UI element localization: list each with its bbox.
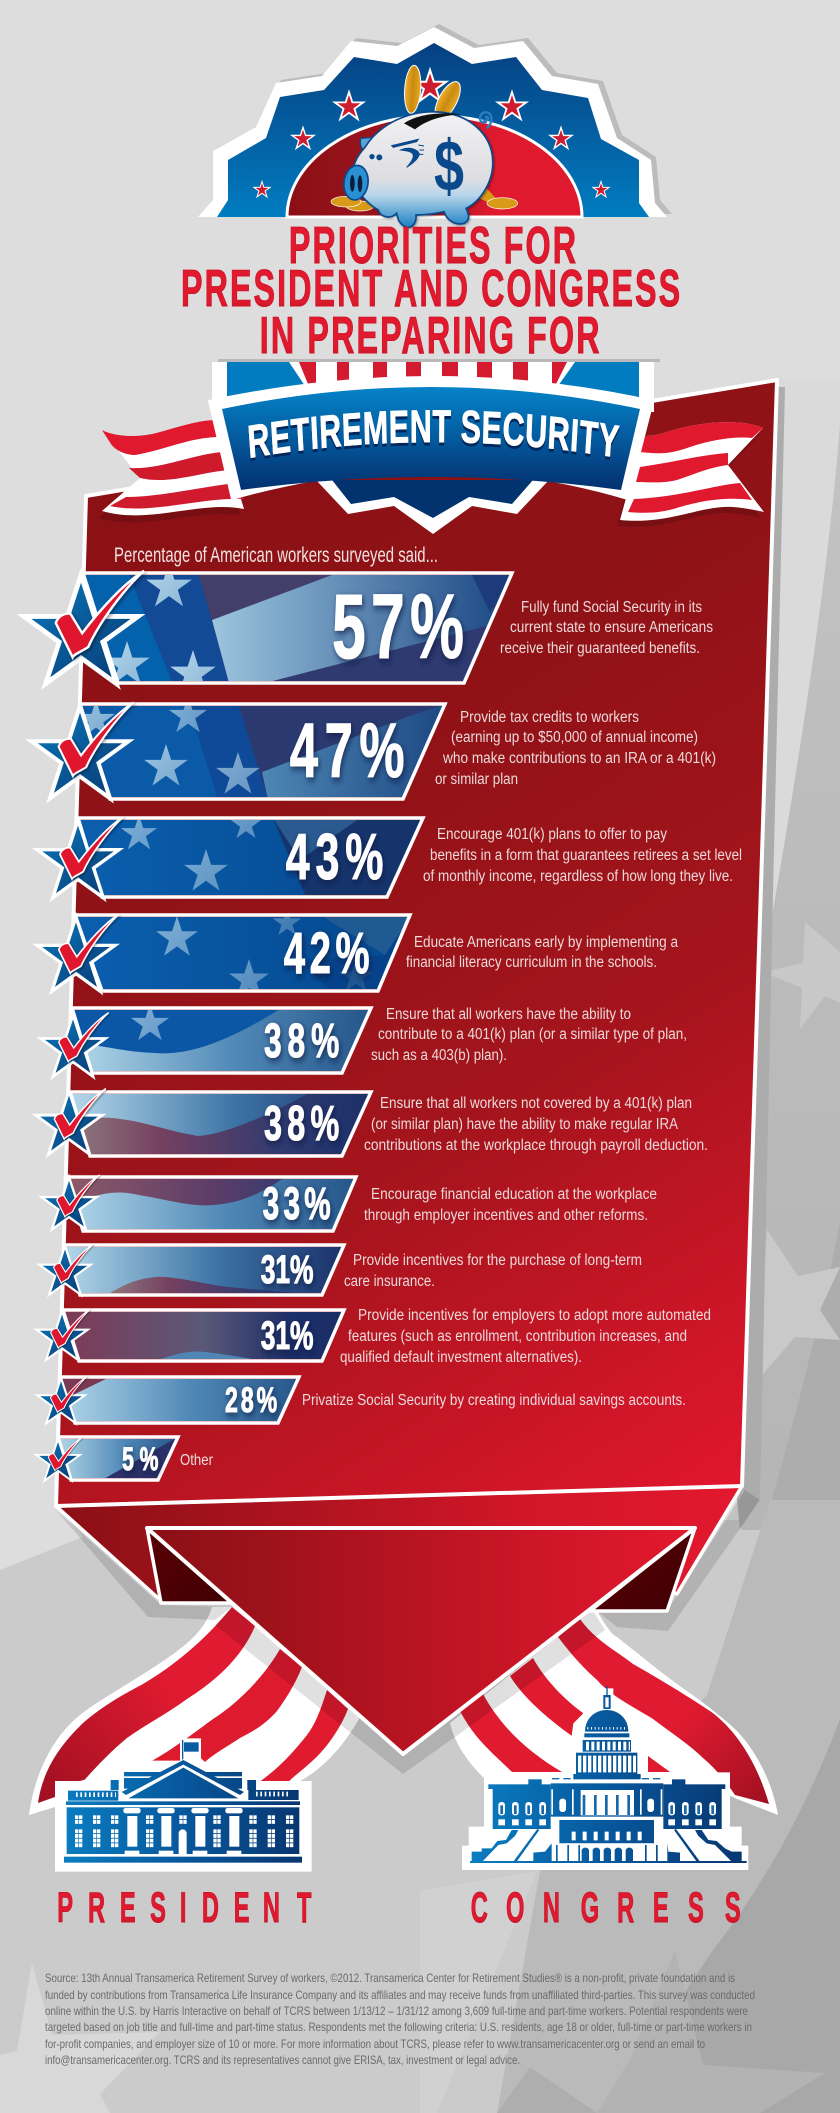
star check icon	[31, 702, 134, 798]
building: Capitol	[462, 1686, 748, 1870]
description	[340, 1307, 711, 1366]
description: Ensure that all workers have the ability to	[386, 1006, 631, 1023]
row 2: 47%	[31, 696, 716, 800]
star check icon	[41, 1175, 99, 1229]
title: PRESIDENT AND CONGRESS	[181, 260, 680, 318]
left streamer	[29, 1607, 360, 1815]
row 11: 5%	[36, 1437, 213, 1481]
building: White House	[55, 1738, 312, 1872]
description: Educate Americans early by implementing a	[414, 934, 678, 951]
bar	[71, 1179, 354, 1229]
description: Other	[180, 1452, 213, 1469]
value: 42%	[284, 922, 370, 986]
source footnote	[45, 1971, 755, 2067]
bottom point	[316, 480, 549, 534]
value: 47%	[290, 707, 405, 794]
description	[435, 709, 716, 788]
bar	[62, 1379, 296, 1421]
star check icon	[41, 1013, 109, 1077]
description: Privatize Social Security by creating individual savings accounts.	[302, 1392, 686, 1409]
description: Fully fund Social Security in its	[521, 599, 702, 616]
bar	[70, 1092, 372, 1157]
row 10: 28%	[37, 1376, 686, 1425]
star check icon	[24, 571, 144, 684]
description: such as a 403(b) plan).	[371, 1047, 507, 1064]
title: IN PREPARING FOR	[260, 307, 600, 365]
description	[500, 599, 713, 657]
label: President: PRESIDENT	[57, 1885, 311, 1932]
description: receive their guaranteed benefits.	[500, 640, 700, 657]
description	[344, 1252, 642, 1290]
star check icon	[36, 1437, 82, 1481]
star check icon	[36, 1309, 90, 1360]
value: 57%	[332, 574, 464, 678]
description: of monthly income, regardless of how long they live.	[423, 868, 733, 885]
description: Provide incentives for employers to adopt more automated	[358, 1307, 711, 1324]
source footnote: for-profit companies, and employer size of 10 or more. For more information about TCRS, please refer to www.transamericacenter.org or send an email to	[45, 2037, 705, 2051]
description: through employer incentives and other reforms.	[364, 1207, 648, 1224]
description: contribute to a 401(k) plan (or a similar type of plan,	[378, 1026, 687, 1043]
star check icon	[37, 1376, 87, 1423]
badge: upper starburst	[198, 24, 672, 227]
bar	[66, 1312, 342, 1359]
description: care insurance.	[344, 1273, 435, 1290]
description: benefits in a form that guarantees retirees a set level	[430, 847, 742, 864]
bar	[82, 706, 442, 797]
description	[371, 1006, 687, 1064]
star check icon	[36, 1089, 106, 1154]
bar	[80, 820, 420, 895]
description: Ensure that all workers not covered by a 401(k) plan	[380, 1095, 692, 1112]
fold: left dark	[147, 1528, 232, 1603]
value: 5%	[122, 1440, 158, 1477]
star check icon	[39, 1244, 93, 1295]
star check icon	[37, 914, 119, 991]
description: (or similar plan) have the ability to make regular IRA	[371, 1116, 679, 1133]
description: who make contributions to an IRA or a 401(k)	[442, 750, 716, 767]
piggy bank	[331, 65, 518, 227]
badge white outline	[198, 27, 667, 217]
badge shadow	[203, 24, 672, 214]
row 3: 43%	[37, 809, 742, 898]
fold: right dark	[590, 1528, 695, 1611]
label: Congress: CONGRESS	[471, 1885, 741, 1932]
description: Encourage 401(k) plans to offer to pay	[437, 826, 667, 843]
value: 28%	[225, 1381, 277, 1420]
bar	[60, 1439, 176, 1478]
row 4: 42%	[37, 908, 678, 997]
right streamer	[450, 1609, 778, 1815]
description: Encourage financial education at the workplace	[371, 1186, 657, 1203]
bar	[66, 1247, 342, 1293]
piggy bank: $	[434, 127, 464, 207]
source footnote: info@transamericacenter.org. TCRS and its representatives cannot give ERISA, tax, investment or legal advice.	[45, 2053, 520, 2067]
badge blue field	[217, 43, 649, 217]
stars	[254, 70, 609, 197]
description: Provide incentives for the purchase of long-term	[353, 1252, 642, 1269]
ribbon tail: left	[99, 420, 244, 522]
title	[181, 217, 680, 365]
red panel	[56, 380, 777, 1506]
description	[364, 1186, 657, 1224]
bar	[74, 1010, 368, 1071]
bar	[78, 917, 408, 989]
description: current state to ensure Americans	[510, 619, 713, 636]
row 9: 31%	[36, 1307, 711, 1366]
description: financial literacy curriculum in the schools.	[406, 954, 657, 971]
row 6: 38%	[36, 1089, 708, 1157]
description	[364, 1095, 708, 1154]
badge: lower section	[212, 359, 660, 534]
description: or similar plan	[435, 771, 518, 788]
row 1: 57%	[24, 563, 713, 693]
description: qualified default investment alternatives).	[340, 1349, 582, 1366]
value: 38%	[264, 1095, 339, 1151]
value: 31%	[261, 1248, 314, 1292]
panel shadow	[735, 387, 785, 1530]
title: PRIORITIES FOR	[289, 217, 576, 275]
stripes	[289, 362, 575, 386]
banner: lower folded band	[56, 1486, 742, 1754]
banner shadows	[56, 1490, 760, 1774]
value: 43%	[286, 820, 383, 893]
row 8: 31%	[39, 1244, 642, 1297]
value: 31%	[261, 1314, 314, 1358]
ribbon: Retirement Security: RETIREMENT SECURITY	[248, 410, 620, 461]
badge red arch	[287, 116, 582, 217]
ribbon tail: right	[617, 422, 764, 527]
description: contributions at the workplace through payroll deduction.	[364, 1137, 708, 1154]
description	[423, 826, 742, 885]
description: features (such as enrollment, contribution increases, and	[348, 1328, 687, 1345]
description: Provide tax credits to workers	[460, 709, 639, 726]
bar	[86, 575, 510, 681]
ribbon: Retirement Security	[208, 376, 652, 500]
value: 38%	[264, 1013, 339, 1068]
row 7: 33%	[41, 1175, 657, 1233]
star check icon	[37, 817, 123, 898]
value: 33%	[263, 1179, 331, 1230]
row 5: 38%	[41, 1004, 687, 1077]
banner: main triangle	[147, 1528, 695, 1754]
intro line: Percentage of American workers surveyed said...	[114, 544, 438, 567]
description: (earning up to $50,000 of annual income)	[451, 729, 698, 746]
description	[406, 934, 678, 971]
